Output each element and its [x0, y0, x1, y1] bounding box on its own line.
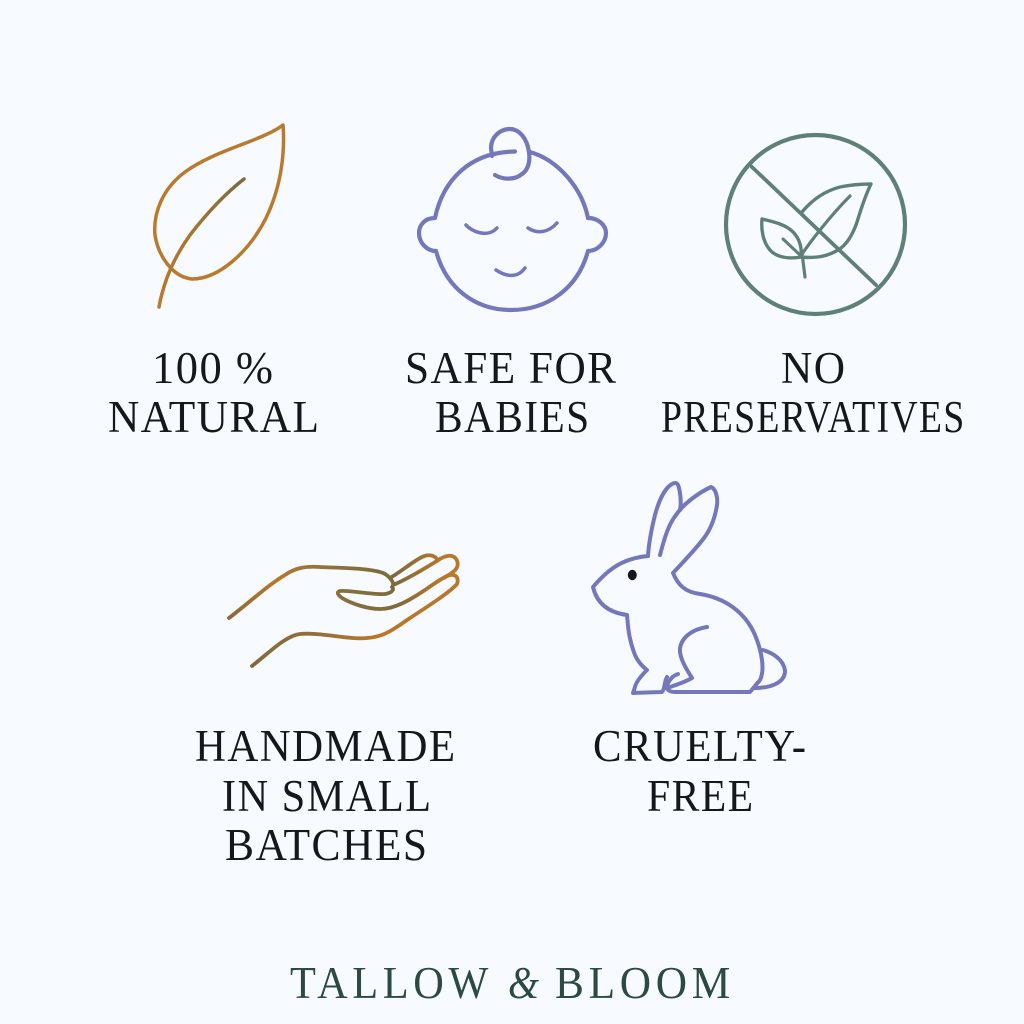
- label: handmade in small batches: BATCHES: [225, 820, 428, 870]
- label: cruelty-free: FREE: [647, 771, 754, 821]
- label: 100% natural: 100 %: [152, 343, 274, 393]
- icon: rabbit: [593, 483, 785, 693]
- brand name: BLOOM: [555, 957, 735, 1008]
- label: safe for babies: [405, 343, 618, 442]
- label: handmade in small batches: [195, 721, 456, 870]
- label: safe for babies: BABIES: [435, 392, 590, 442]
- label: handmade in small batches: HANDMADE: [195, 721, 456, 771]
- label: cruelty-free: CRUELTY-: [593, 721, 808, 771]
- label: no preservatives: PRESERVATIVES: [661, 392, 966, 442]
- label: safe for babies: SAFE FOR: [405, 343, 618, 393]
- icon: no preservatives: [726, 135, 905, 314]
- brand name: &: [508, 957, 539, 1008]
- icon: leaf: [155, 125, 284, 307]
- brand name: [290, 957, 735, 1008]
- label: no preservatives: [661, 343, 966, 442]
- label: cruelty-free: [593, 721, 808, 821]
- label: 100% natural: [108, 343, 320, 442]
- brand name: TALLOW: [290, 957, 493, 1008]
- label: no preservatives: NO: [781, 343, 846, 393]
- label: handmade in small batches: IN SMALL: [222, 771, 432, 821]
- icon: open hand: [229, 555, 458, 666]
- label: 100% natural: NATURAL: [108, 392, 320, 442]
- icon: baby face: [419, 129, 606, 310]
